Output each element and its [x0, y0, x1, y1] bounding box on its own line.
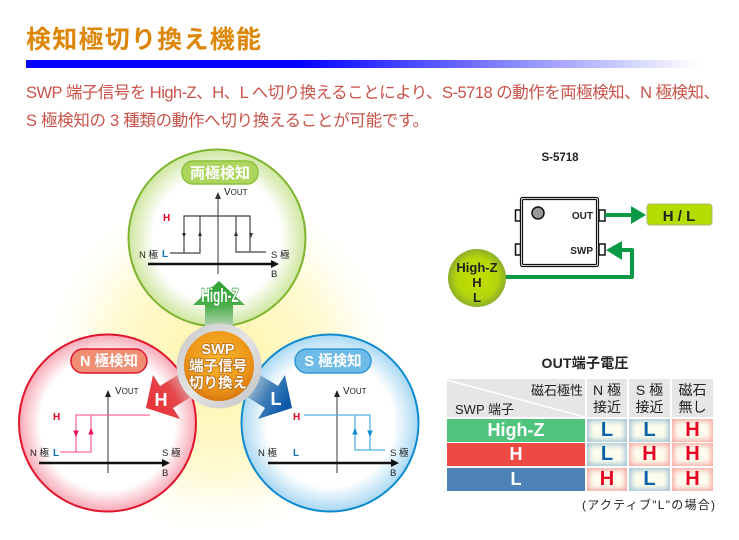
table header: corner: [447, 379, 585, 417]
cell: [672, 468, 713, 491]
panel: N-pole detection: [19, 334, 196, 512]
cell: [629, 443, 670, 466]
row label: L: L: [510, 469, 522, 489]
row label: L: [447, 468, 585, 491]
input circle: High-Z: [456, 260, 498, 275]
table header: S pole: 接近: [636, 399, 664, 415]
cell: H: [685, 468, 700, 490]
badge: both-pole: [182, 161, 258, 184]
arrow: High-Z: High-Z: [201, 286, 239, 307]
arrow: input to SWP: [505, 250, 632, 277]
chart: both-pole hysteresis: N 極: [139, 249, 158, 261]
row label: H: [447, 443, 585, 466]
chart: N-pole hysteresis: S 極: [162, 447, 181, 459]
arrow: H: [146, 373, 194, 419]
chart: S-pole hysteresis: [258, 386, 409, 479]
label: S-5718: S-5718: [541, 152, 579, 164]
cell: L: [643, 419, 656, 441]
chart: N-pole hysteresis: VOUT: [115, 386, 139, 397]
cell: H: [600, 468, 614, 490]
cell: [629, 468, 670, 491]
table header: N pole: 接近: [593, 399, 621, 415]
cell: L: [643, 468, 656, 490]
cell: [672, 443, 713, 466]
arrow: OUT to H/L: [605, 206, 646, 224]
chart: S-pole hysteresis: B: [390, 468, 396, 479]
cell: [587, 443, 627, 466]
cell: [672, 419, 713, 442]
chart: N-pole hysteresis: B: [162, 468, 168, 479]
background glow: [34, 177, 404, 540]
chart: both-pole hysteresis: B: [271, 269, 277, 280]
arrow: L: L: [270, 389, 282, 409]
row label: High-Z: High-Z: [488, 420, 544, 440]
badge: N-pole: N 極検知: [80, 353, 138, 370]
chart: N-pole hysteresis: [30, 386, 181, 479]
chart: N-pole hysteresis: L: [53, 448, 59, 459]
chart: N-pole hysteresis: H: [53, 412, 60, 423]
cell: [587, 419, 627, 442]
cell: [629, 419, 670, 442]
table header: N pole: [587, 379, 627, 417]
arrow: L: [244, 373, 292, 419]
table header: no magnet: [672, 379, 713, 417]
title: 検知極切り換え機能: [26, 26, 261, 54]
title rule: [26, 60, 700, 68]
central switch button: 端子信号: [189, 358, 247, 375]
table header: corner: 磁石極性: [531, 383, 583, 398]
intro text: S 極検知の 3 種類の動作へ切り換えることが可能です。: [26, 111, 429, 130]
row label: High-Z: [447, 419, 585, 442]
table header: no magnet: 無し: [678, 399, 706, 415]
input circle: [448, 249, 506, 307]
badge: both-pole: 両極検知: [190, 164, 250, 182]
table header: corner: SWP 端子: [455, 402, 514, 417]
cell: H: [685, 443, 700, 465]
cell: H: [642, 443, 657, 465]
table header: S pole: S 極: [636, 382, 663, 398]
chart: S-pole hysteresis: N 極: [258, 447, 278, 459]
central switch button: SWP: [201, 342, 235, 358]
chart: both-pole hysteresis: S 極: [271, 249, 290, 261]
table header: no magnet: 磁石: [678, 382, 706, 398]
table header: S pole: [629, 379, 670, 417]
cell: L: [601, 443, 613, 465]
IC package: OUT: [572, 211, 593, 222]
IC package: [516, 198, 605, 266]
central switch button: 切り換え: [189, 374, 247, 392]
badge: S-pole: S 極検知: [304, 353, 362, 370]
input circle: L: [473, 290, 481, 305]
chart: N-pole hysteresis: N 極: [30, 447, 50, 459]
chart: S-pole hysteresis: S 極: [390, 447, 409, 459]
badge: S-pole: [295, 349, 371, 373]
cell: [587, 468, 627, 491]
table header: N pole: N 極: [593, 382, 621, 398]
intro text: SWP 端子信号を High-Z、H、L へ切り換えることにより、S-5718 の動作を両極検知、N 極検知、: [26, 83, 720, 102]
row label: H: H: [510, 444, 522, 464]
table note: (アクティブ"L"の場合): [582, 497, 715, 512]
arrow: High-Z: [193, 281, 245, 332]
badge: N-pole: [71, 349, 147, 373]
cell: L: [601, 419, 613, 441]
chart: S-pole hysteresis: H: [293, 412, 300, 423]
table title: OUT端子電圧: [542, 355, 628, 371]
intro text: [26, 83, 720, 130]
input circle: H: [472, 275, 482, 290]
central switch button: [176, 324, 262, 408]
chart: S-pole hysteresis: VOUT: [343, 386, 367, 397]
output box: H/L: [647, 204, 712, 225]
chart: both-pole hysteresis: L: [162, 249, 168, 260]
cell: H: [685, 419, 700, 441]
IC package: SWP: [570, 246, 593, 257]
chart: S-pole hysteresis: L: [293, 448, 299, 459]
chart: both-pole hysteresis: VOUT: [224, 187, 248, 198]
panel: S-pole detection: [242, 334, 418, 512]
chart: both-pole hysteresis: [139, 187, 290, 280]
panel: both-pole detection: [128, 150, 306, 326]
arrow: H: H: [154, 390, 168, 410]
chart: both-pole hysteresis: H: [163, 213, 170, 224]
output box: H/L: H / L: [663, 208, 695, 225]
